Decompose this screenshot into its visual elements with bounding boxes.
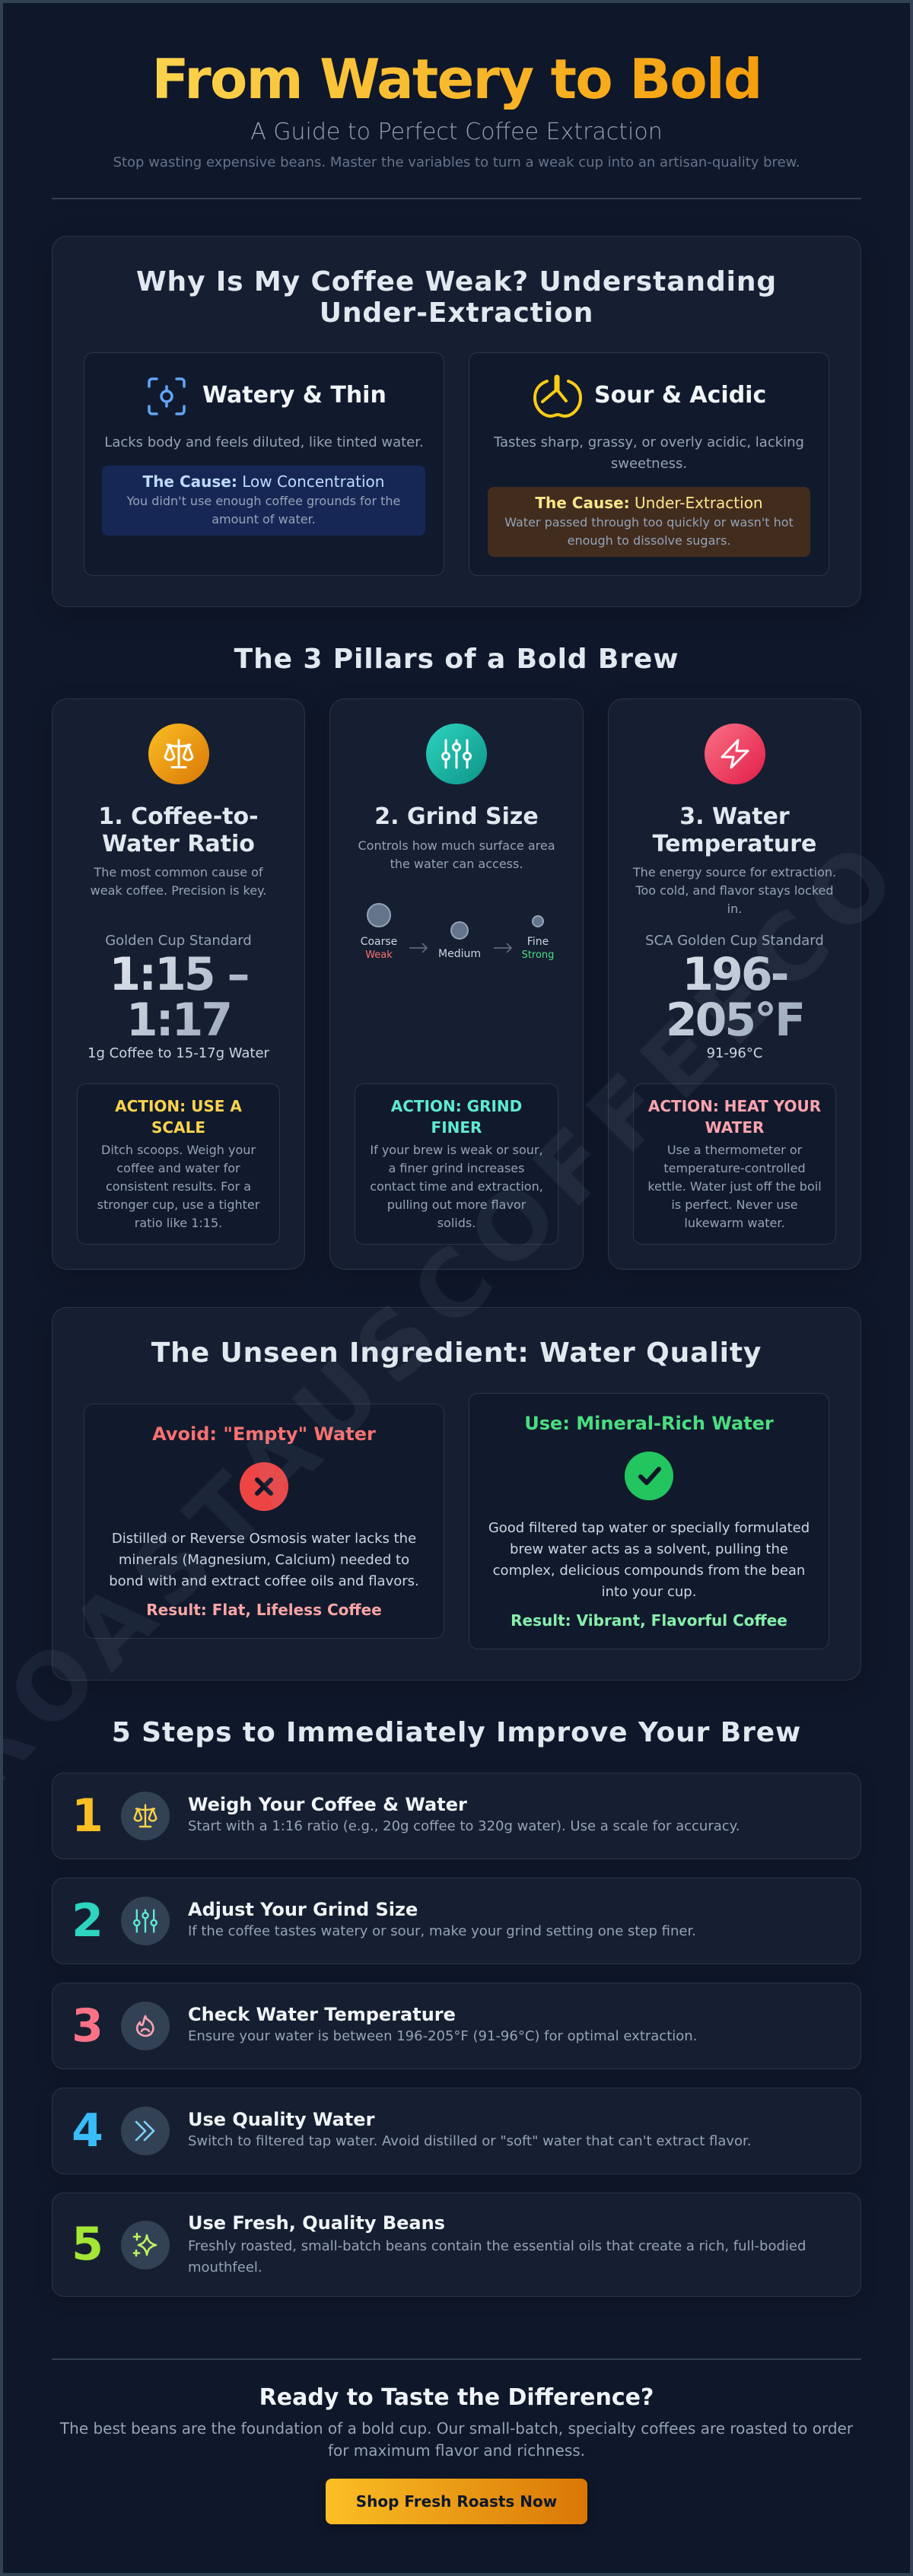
arrow xyxy=(494,943,512,952)
step number: 3 xyxy=(72,1999,103,2053)
result: Result: Flat, Lifeless Coffee xyxy=(146,1601,382,1619)
step title: Weigh Your Coffee & Water xyxy=(188,1794,467,1815)
card title: Use: Mineral-Rich Water xyxy=(524,1413,774,1434)
action text xyxy=(97,1143,260,1230)
action text: ratio like 1:15. xyxy=(135,1216,222,1230)
pillar description: Too cold, and flavor stays locked xyxy=(635,883,834,898)
cta heading: Ready to Taste the Difference? xyxy=(259,2384,654,2411)
step 5 xyxy=(52,2193,861,2297)
celsius note: 91-96°C xyxy=(707,1045,762,1061)
panel: coffee-to-water ratio xyxy=(52,698,305,1270)
pillar description: The most common cause of xyxy=(94,865,263,879)
step text xyxy=(188,2238,806,2275)
card: avoid empty water xyxy=(84,1404,444,1639)
icon: sliders xyxy=(426,724,487,784)
cta text: for maximum flavor and richness. xyxy=(328,2441,585,2460)
pillar description: in. xyxy=(727,902,742,916)
description: minerals (Magnesium, Calcium) needed to xyxy=(119,1552,409,1568)
step title: Adjust Your Grind Size xyxy=(188,1899,418,1920)
description: Distilled or Reverse Osmosis water lacks the xyxy=(112,1531,416,1547)
card title: Sour & Acidic xyxy=(594,382,766,409)
action text xyxy=(370,1143,543,1230)
step title: Use Fresh, Quality Beans xyxy=(188,2212,445,2234)
panel: grind size xyxy=(329,698,584,1270)
step number: 1 xyxy=(72,1789,103,1843)
action text: is perfect. Never use xyxy=(671,1197,798,1212)
ratio value xyxy=(109,948,248,1047)
card title: Watery & Thin xyxy=(202,382,387,409)
action text: Use a thermometer or xyxy=(667,1143,802,1157)
icon: chevrons xyxy=(121,2107,170,2155)
grind size scale: Coarse xyxy=(361,936,397,948)
panel: water quality xyxy=(52,1307,861,1681)
action text: lukewarm water. xyxy=(684,1216,785,1230)
cause detail: enough to dissolve sugars. xyxy=(568,533,730,548)
medium grind xyxy=(450,921,469,940)
action text: stronger cup, use a tighter xyxy=(97,1197,259,1212)
cause detail: amount of water. xyxy=(212,512,316,526)
pillar title xyxy=(98,803,259,857)
step 4 xyxy=(52,2088,861,2174)
action text: If your brew is weak or sour, xyxy=(370,1143,543,1157)
description xyxy=(109,1531,419,1589)
card title: Avoid: "Empty" Water xyxy=(152,1423,376,1445)
cause detail xyxy=(504,515,794,548)
grind size scale: Medium xyxy=(438,948,481,960)
ratio value: 1:15 – xyxy=(109,948,248,1001)
step title: Use Quality Water xyxy=(188,2109,374,2130)
button: Shop Fresh Roasts Now xyxy=(356,2492,557,2511)
cause box xyxy=(488,487,810,557)
icon: sparkles xyxy=(121,2221,170,2269)
action text: Ditch scoops. Weigh your xyxy=(101,1143,256,1157)
action heading: ACTION: HEAT YOUR xyxy=(648,1097,821,1115)
description: Lacks body and feels diluted, like tinted water. xyxy=(104,434,424,450)
action text xyxy=(647,1143,822,1230)
step text: If the coffee tastes watery or sour, make your grind setting one step finer. xyxy=(188,1923,696,1939)
pillar title xyxy=(653,803,816,857)
icon: scale xyxy=(148,724,209,784)
step text: Switch to filtered tap water. Avoid distilled or "soft" water that can't extract flavor. xyxy=(188,2133,752,2149)
action heading: ACTION: USE A xyxy=(115,1097,242,1115)
button xyxy=(326,2479,587,2524)
grind size scale: Strong xyxy=(522,949,554,961)
step 3 xyxy=(52,1983,861,2069)
grind size scale: Fine xyxy=(527,936,549,948)
heading: under-extraction: Under-Extraction xyxy=(320,297,593,329)
description: Tastes sharp, grassy, or overly acidic, lacking xyxy=(494,434,804,450)
ratio note: 1g Coffee to 15-17g Water xyxy=(87,1045,269,1061)
action box xyxy=(355,1083,558,1245)
step text: mouthfeel. xyxy=(188,2260,262,2275)
icon: cross xyxy=(240,1462,288,1511)
pillar title: 3. Water xyxy=(679,803,790,830)
panel: why is my coffee weak xyxy=(52,236,861,607)
icon: bolt xyxy=(705,724,765,784)
action text: consistent results. For a xyxy=(106,1179,251,1194)
panel: water temperature xyxy=(608,698,861,1270)
cta text: The best beans are the foundation of a bold cup. Our small-batch, specialty coffees are roasted to order xyxy=(60,2419,853,2438)
tagline: Stop wasting expensive beans. Master the variables to turn a weak cup into an artisan-quality brew. xyxy=(113,154,800,170)
pillar description: the water can access. xyxy=(390,857,523,871)
step text: Start with a 1:16 ratio (e.g., 20g coffee to 320g water). Use a scale for accuracy. xyxy=(188,1818,740,1834)
icon: sliders xyxy=(121,1897,170,1945)
description xyxy=(488,1520,810,1600)
icon: sour fruit xyxy=(533,374,582,418)
step number: 4 xyxy=(72,2104,103,2158)
pillar title: 2. Grind Size xyxy=(374,803,539,830)
action text: coffee and water for xyxy=(116,1161,240,1175)
cause detail: Water passed through too quickly or wasn't hot xyxy=(504,515,794,530)
call to action xyxy=(59,2384,854,2524)
description: bond with and extract coffee oils and flavors. xyxy=(109,1573,419,1589)
grind size scale: Weak xyxy=(365,949,393,961)
header xyxy=(113,47,800,170)
temperature value: 205°F xyxy=(666,994,803,1047)
arrow xyxy=(409,943,428,952)
title: From Watery to Bold xyxy=(151,47,762,111)
action text: kettle. Water just off the boil xyxy=(647,1179,822,1194)
action heading: ACTION: GRIND xyxy=(391,1097,522,1115)
description: sweetness. xyxy=(611,456,687,472)
description: complex, delicious compounds from the bean xyxy=(493,1563,805,1579)
card: use mineral-rich water xyxy=(469,1393,829,1649)
pillar description: Controls how much surface area xyxy=(358,838,555,853)
step 1 xyxy=(52,1773,861,1859)
icon: check xyxy=(625,1452,673,1500)
heading: under-extraction: Why Is My Coffee Weak? Understanding xyxy=(136,266,777,297)
pillar description xyxy=(91,865,266,898)
icon: focus target xyxy=(148,377,186,415)
action text: temperature-controlled xyxy=(663,1161,806,1175)
cause box xyxy=(102,466,425,536)
action heading xyxy=(391,1097,522,1137)
pillar description: weak coffee. Precision is key. xyxy=(91,883,266,898)
action heading: FINER xyxy=(431,1118,482,1137)
cause detail: You didn't use enough coffee grounds for the xyxy=(127,494,400,508)
action heading: SCALE xyxy=(151,1118,205,1137)
action heading xyxy=(115,1097,242,1137)
action text: contact time and extraction, xyxy=(370,1179,543,1194)
description: Good filtered tap water or specially formulated xyxy=(488,1520,810,1536)
heading: three pillars: The 3 Pillars of a Bold Brew xyxy=(234,644,679,675)
result: Result: Vibrant, Flavorful Coffee xyxy=(511,1611,787,1630)
description: into your cup. xyxy=(602,1584,696,1600)
cause heading: The Cause: Under-Extraction xyxy=(535,494,763,512)
action heading: WATER xyxy=(705,1118,764,1137)
heading: five steps: 5 Steps to Immediately Improve Your Brew xyxy=(112,1717,801,1748)
action box xyxy=(633,1083,836,1245)
action text: a finer grind increases xyxy=(389,1161,524,1175)
subtitle: A Guide to Perfect Coffee Extraction xyxy=(250,119,663,145)
action text: solids. xyxy=(437,1216,476,1230)
heading: under-extraction xyxy=(136,266,777,329)
step title: Check Water Temperature xyxy=(188,2004,456,2025)
cta text xyxy=(59,2419,854,2460)
cause heading: The Cause: Low Concentration xyxy=(143,472,384,491)
step 2 xyxy=(52,1878,861,1964)
temperature value: 196- xyxy=(682,948,787,1001)
fine grind xyxy=(532,915,544,927)
description: brew water acts as a solvent, pulling the xyxy=(510,1541,788,1557)
action box xyxy=(77,1083,280,1245)
step number: 5 xyxy=(72,2218,103,2271)
pillar description xyxy=(633,865,836,916)
ratio value: 1:17 xyxy=(126,994,231,1047)
step text: Freshly roasted, small-batch beans contain the essential oils that create a rich, full-bodied xyxy=(188,2238,806,2254)
icon: scale xyxy=(121,1792,170,1840)
card: watery and thin xyxy=(84,352,444,576)
action text: pulling out more flavor xyxy=(387,1197,526,1212)
coarse grind xyxy=(367,903,391,927)
pillar title: Water Ratio xyxy=(102,831,255,857)
card: sour and acidic xyxy=(469,352,829,576)
temperature value xyxy=(666,948,803,1047)
cause detail xyxy=(126,494,400,526)
icon: flame xyxy=(121,2002,170,2050)
standard label: Golden Cup Standard xyxy=(105,933,252,949)
action heading xyxy=(648,1097,821,1137)
grind size scale xyxy=(361,903,554,961)
pillar description xyxy=(358,838,555,871)
pillar title: Temperature xyxy=(653,831,816,857)
pillar description: The energy source for extraction. xyxy=(633,865,836,879)
pillar title: 1. Coffee-to- xyxy=(98,803,259,830)
step number: 2 xyxy=(72,1894,103,1948)
step text: Ensure your water is between 196-205°F (91-96°C) for optimal extraction. xyxy=(188,2028,697,2044)
standard label: SCA Golden Cup Standard xyxy=(645,933,824,949)
description xyxy=(493,434,804,472)
heading: water quality: The Unseen Ingredient: Water Quality xyxy=(151,1337,762,1369)
